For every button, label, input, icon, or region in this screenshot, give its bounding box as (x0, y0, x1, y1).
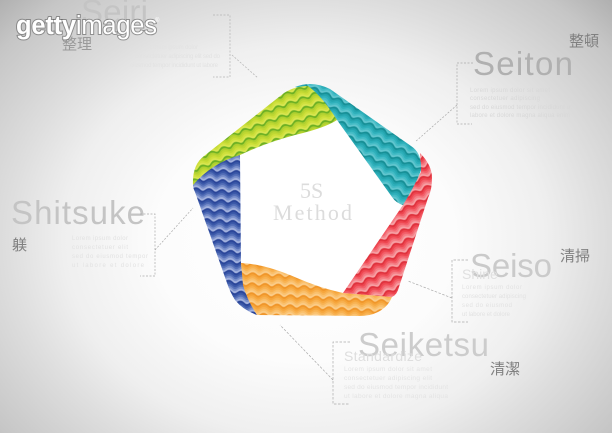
description: Shitsuke: ut labore et dolore (72, 263, 145, 269)
description: Seiso: ut labore et dolore (462, 312, 511, 318)
kanji: Seiton: 整頓 (569, 33, 599, 50)
kanji: Seiri: 整理 (62, 36, 92, 53)
description: Shitsuke: Lorem ipsum dolor (72, 236, 128, 242)
logo text: gettyimages (16, 12, 157, 40)
callout: Seiri (62, 0, 258, 78)
bracket and leader: Seiketsu (280, 325, 350, 404)
bracket and leader: Shitsuke (140, 208, 193, 276)
description: Seiketsu: consectetuer adipiscing elit (344, 375, 432, 382)
description: Seiri: eiusmod tempor incididunt ut labore (130, 63, 219, 69)
description: Seiso: Lorem ipsum dolor (462, 285, 522, 291)
segment: red Seiso (343, 153, 432, 297)
subheading: Shine: Shine (462, 266, 498, 282)
description: Seiton: sed do eiusmod tempor incididunt ut (470, 105, 572, 111)
pentagon diagram (193, 84, 432, 316)
kanji: Seiketsu: 清潔 (490, 361, 520, 378)
heading: Seiso: Seiso (470, 247, 552, 284)
description: Seiri (130, 45, 221, 69)
callout: Shitsuke (11, 194, 193, 276)
description: Seiton (470, 88, 572, 119)
description: Seiketsu: sed do eiusmod tempor incididunt (344, 384, 448, 391)
callout: Seiton (415, 33, 599, 142)
segment: orange Seiketsu (241, 263, 392, 316)
description: Seiso: sed do eiusmod (462, 303, 512, 309)
description: Seiton: Lorem ipsum dolor sit amet (470, 88, 550, 94)
segment: blue Shitsuke (193, 155, 257, 315)
description: Shitsuke: sed do eiusmod tempor (72, 254, 148, 260)
description: Seiton: consectetuer adipiscing (470, 96, 540, 102)
description: Seiri: consectetuer adipiscing elit sed do (135, 54, 221, 60)
description: Shitsuke (72, 236, 148, 269)
kanji: Seiso: 清掃 (560, 247, 590, 265)
heading: Shitsuke: Shitsuke (11, 194, 145, 231)
description: Seiso: consectetuer adipiscing (462, 294, 526, 300)
callout: Seiketsu (280, 325, 520, 404)
description: Seiton: labore et dolore magna aliqua enim (470, 113, 570, 119)
segment: green Seiri (193, 86, 337, 185)
kanji: Shitsuke: 躾 (12, 237, 27, 254)
description: Seiketsu: Lorem ipsum dolor sit amet (344, 366, 432, 373)
description: Seiso (462, 285, 526, 318)
watermark logo (16, 12, 160, 40)
bracket and leader: Seiso (408, 260, 468, 322)
pentagon white centre (238, 120, 403, 293)
centre title: 5S (300, 178, 323, 203)
heading: Seiketsu: Seiketsu (358, 326, 489, 363)
description: Seiketsu (344, 366, 448, 400)
centre title (273, 178, 352, 225)
subheading: Standardize: Standardize (344, 348, 422, 364)
segment: teal Seiton (295, 84, 421, 205)
heading: Seiton: Seiton (473, 45, 573, 82)
logo shadow: gettyimages (16, 12, 157, 40)
description: Seiri: Lorem ipsum dolor (150, 45, 198, 51)
bracket and leader: Seiri (213, 15, 258, 78)
description: Seiketsu: ut labore et dolore magna aliqua (344, 393, 448, 400)
logo registered mark: ® (155, 17, 160, 24)
centre title: Method (273, 200, 352, 225)
callout: Seiso (408, 247, 590, 322)
description: Shitsuke: consectetuer elit (72, 245, 128, 251)
bracket and leader: Seiton (415, 63, 473, 142)
